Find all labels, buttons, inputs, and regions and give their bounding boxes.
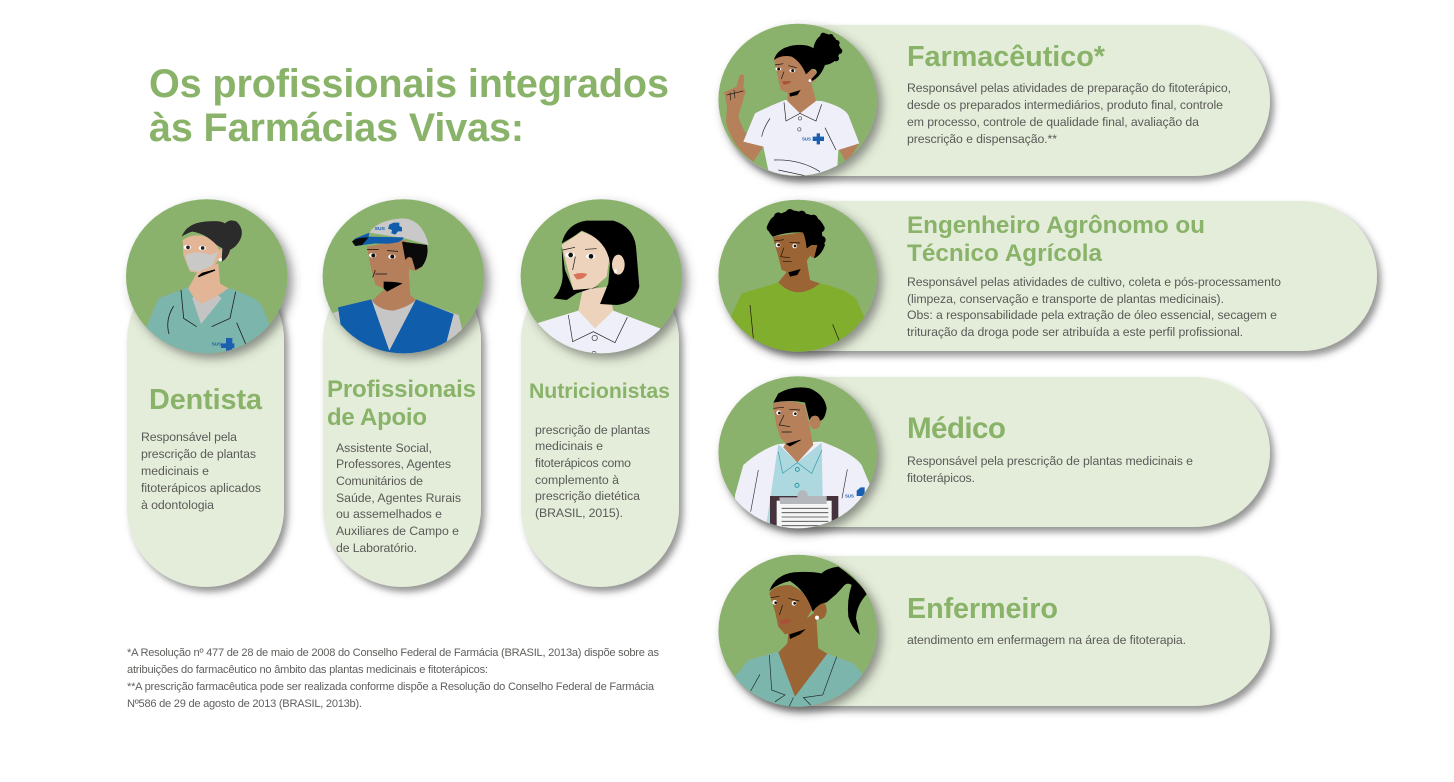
text: Nutricionistas description <box>535 423 650 520</box>
icon: dentist portrait <box>126 199 287 357</box>
heading: Nutricionistas: Nutricionistas <box>529 379 670 403</box>
footnotes: atribuições do farmacêutico no âmbito das plantas medicinais e fitoterápicos: <box>127 664 488 676</box>
heading: Médico: Médico <box>907 412 1006 445</box>
text: Dentista description: à odontologia <box>141 498 214 512</box>
text: Nutricionistas description: (BRASIL, 2015). <box>535 506 623 520</box>
title <box>149 62 669 150</box>
text: Dentista description: medicinais e <box>141 464 209 478</box>
heading: Dentista: Dentista <box>149 384 263 416</box>
text: Profissionais de Apoio description: Comunitários de <box>336 474 423 488</box>
text: Nutricionistas description: fitoterápicos como <box>535 456 631 470</box>
text: Profissionais de Apoio description: Assistente Social, <box>336 441 432 455</box>
text: Dentista description: Responsável pela <box>141 430 237 444</box>
title: às Farmácias Vivas: <box>149 106 524 150</box>
text: Profissionais de Apoio description: Professores, Agentes <box>336 457 451 471</box>
text: Médico description: Responsável pela prescrição de plantas medicinais e <box>907 454 1193 468</box>
text: Nutricionistas description: prescrição de plantas <box>535 423 650 437</box>
footnotes: *A Resolução nº 477 de 28 de maio de 2008 do Conselho Federal de Farmácia (BRASIL, 2013a) dispõe sobre as <box>127 647 659 659</box>
text: Médico description: fitoterápicos. <box>907 471 975 485</box>
heading: Profissionais de Apoio <box>327 376 476 431</box>
text: Engenheiro description: trituração da droga pode ser atribuída a este perfil profissional. <box>907 325 1243 339</box>
panel: Nutricionistas <box>521 199 682 587</box>
text: Farmacêutico description <box>907 81 1231 146</box>
panel: Engenheiro Agrônomo ou Técnico Agrícola <box>718 200 1377 362</box>
text: Engenheiro description: (limpeza, conservação e transporte de plantas medicinais). <box>907 292 1224 306</box>
title: Os profissionais integrados <box>149 62 669 106</box>
icon: doctor portrait <box>718 376 877 533</box>
text: Farmacêutico description: Responsável pelas atividades de preparação do fitoterápico, <box>907 81 1231 95</box>
icon: support professional portrait: SUS <box>375 226 386 232</box>
footnotes <box>127 647 659 710</box>
text: Farmacêutico description: prescrição e dispensação.** <box>907 132 1057 146</box>
icon: nutritionist portrait <box>521 199 682 357</box>
text: Farmacêutico description: desde os preparados intermediários, produto final, controle <box>907 98 1223 112</box>
heading: Profissionais de Apoio: Profissionais <box>327 376 476 403</box>
panel: Profissionais de Apoio <box>323 199 484 587</box>
icon: agronomist portrait <box>718 200 877 362</box>
heading: Engenheiro Agrônomo ou Técnico Agrícola: Engenheiro Agrônomo ou <box>907 212 1205 239</box>
text: Nutricionistas description: medicinais e <box>535 439 603 453</box>
text: Dentista description: fitoterápicos aplicados <box>141 481 261 495</box>
panel: Farmacêutico <box>718 24 1270 178</box>
panel: Médico <box>718 376 1270 533</box>
text: Nutricionistas description: complemento à <box>535 473 619 487</box>
heading: Farmacêutico: Farmacêutico* <box>907 41 1106 73</box>
heading: Enfermeiro: Enfermeiro <box>907 593 1058 625</box>
text: Profissionais de Apoio description: Saúde, Agentes Rurais <box>336 491 461 505</box>
heading: Profissionais de Apoio: de Apoio <box>327 404 427 431</box>
text: Profissionais de Apoio description: ou assemelhados e <box>336 507 442 521</box>
text: Profissionais de Apoio description: Auxiliares de Campo e <box>336 524 459 538</box>
footnotes: **A prescrição farmacêutica pode ser realizada conforme dispõe a Resolução do Conselho Federal de Farmácia <box>127 681 655 693</box>
icon: support professional portrait <box>323 199 484 357</box>
icon: doctor portrait: SUS <box>845 493 854 498</box>
text: Profissionais de Apoio description: de Laboratório. <box>336 541 417 555</box>
footnotes: Nº586 de 29 de agosto de 2013 (BRASIL, 2013b). <box>127 698 362 710</box>
panel: Dentista <box>126 199 287 587</box>
panel: Enfermeiro <box>718 555 1270 708</box>
icon: nurse portrait <box>718 555 877 708</box>
text: Farmacêutico description: em processo, controle de qualidade final, avaliação da <box>907 115 1199 129</box>
text: Nutricionistas description: prescrição dietética <box>535 489 640 503</box>
text: Médico description <box>907 454 1193 485</box>
text: Engenheiro description: Obs: a responsabilidade pela extração de óleo essencial, secagem e <box>907 308 1277 322</box>
heading: Engenheiro Agrônomo ou Técnico Agrícola <box>907 212 1205 267</box>
text: Enfermeiro description: atendimento em enfermagem na área de fitoterapia. <box>907 633 1186 647</box>
icon: pharmacist portrait: SUS <box>802 136 811 141</box>
text: Dentista description <box>141 430 261 512</box>
icon: dentist portrait: SUS <box>212 341 221 346</box>
text: Dentista description: prescrição de plantas <box>141 447 256 461</box>
text: Profissionais de Apoio description <box>336 441 461 555</box>
text: Engenheiro description <box>907 275 1281 339</box>
text: Engenheiro description: Responsável pelas atividades de cultivo, coleta e pós-processamento <box>907 275 1281 289</box>
icon: pharmacist portrait <box>718 24 877 178</box>
heading: Engenheiro Agrônomo ou Técnico Agrícola: Técnico Agrícola <box>907 240 1102 267</box>
